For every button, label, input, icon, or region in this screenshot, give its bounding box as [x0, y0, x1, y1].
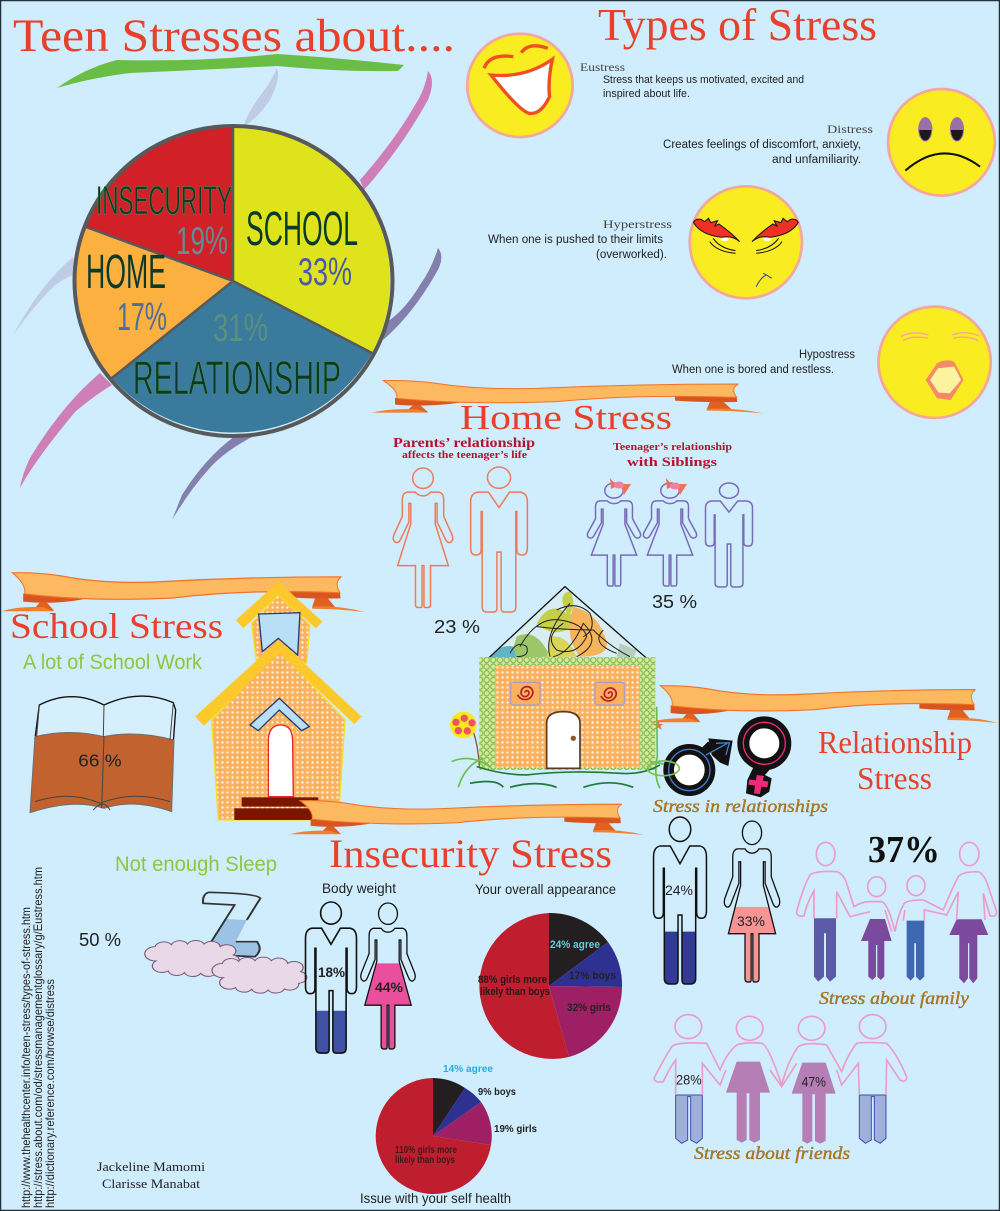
icon: distress face: [888, 89, 995, 196]
pie chart: self health: 9% boys: [478, 1086, 516, 1098]
pie chart: overall appearance: 17% boys: [569, 970, 616, 982]
text: source urls: [19, 867, 57, 1208]
heading: relationship stress: [818, 724, 972, 796]
figure: relationship man 24 percent: 24%: [665, 882, 693, 898]
heading: relationship stress: Stress: [857, 760, 932, 796]
flower: orange: [653, 721, 663, 730]
stat: 23 percent: 23 %: [434, 617, 480, 637]
label: school: 33%: [298, 251, 352, 294]
figures: friends: 47%: [802, 1074, 826, 1090]
pie chart: self health: 19% girls: [494, 1123, 537, 1135]
figure: body weight man 18 percent: 18%: [318, 964, 346, 980]
text: source urls: http://www.thehealthcenter.info/teen-stress/types-of-stress.htm: [19, 907, 33, 1208]
text: eustress: Stress that keeps us motivated, excited and: [603, 74, 804, 86]
icon: open book 66 percent: [30, 696, 176, 813]
text: parents relationship: affects the teenager’s life: [402, 450, 527, 461]
label: stress in relationships: Stress in relationships: [653, 796, 828, 816]
label: insecurity: 19%: [176, 220, 228, 263]
text: parents relationship: Parents’ relationship: [393, 436, 535, 451]
label: relationship: RELATIONSHIP: [133, 351, 341, 404]
panel: home stress: [393, 398, 752, 637]
panel: insecurity stress: [306, 831, 622, 1206]
stat: 35 percent: 35 %: [652, 592, 697, 612]
text: a lot of school work: A lot of School Work: [23, 651, 202, 674]
figure: body weight man 18 percent: [306, 902, 356, 1053]
text: distress: Creates feelings of discomfort, anxiety,: [663, 139, 861, 151]
text: distress: Distress: [827, 124, 874, 136]
title: Teen Stresses about....: [13, 10, 455, 62]
label: relationship: [133, 307, 341, 404]
pie chart: overall appearance: 24% agree: [550, 939, 600, 951]
heading: home stress: Home Stress: [460, 398, 672, 437]
label: stress about friends: Stress about friends: [694, 1143, 850, 1163]
icon: male symbol: [647, 738, 733, 791]
label: stress about family: Stress about family: [819, 988, 969, 1008]
icon: open book 66 percent: 66 %: [78, 751, 122, 771]
text: not enough sleep: Not enough Sleep: [115, 853, 277, 876]
figure: mother: [393, 468, 453, 608]
icon: female symbol: [743, 722, 785, 797]
text: hyperstress: [488, 219, 673, 261]
pie chart: self health: 110% girls more: [395, 1145, 457, 1156]
label: school: [246, 203, 358, 294]
icon: school building: [195, 582, 362, 820]
pie chart: teen stress sources: [74, 126, 392, 436]
label: home: [86, 246, 167, 339]
label: insecurity: [96, 179, 232, 263]
ribbon: home stress: [372, 381, 763, 413]
figure: relationship woman 33 percent: 33%: [737, 913, 765, 929]
figures: friends: 28%: [676, 1071, 702, 1087]
icon: hypostress face: [878, 307, 991, 418]
figure: body weight woman 44 percent: 44%: [375, 979, 404, 995]
ribbon: school stress: [2, 573, 365, 612]
text: hypostress: When one is bored and restless.: [672, 364, 834, 376]
label: body weight: Body weight: [322, 880, 396, 896]
text: authors: Clarisse Manabat: [102, 1176, 200, 1191]
grass: [452, 707, 680, 788]
text: parents relationship: [393, 436, 535, 461]
stat: 37 percent: 37%: [868, 829, 940, 871]
icon: house: [450, 587, 680, 788]
text: source urls: http://dictionary.reference.com/browse/distress: [43, 979, 57, 1208]
window: right: [595, 682, 624, 705]
text: eustress: Eustress: [580, 62, 626, 74]
pie chart: overall appearance: [478, 913, 622, 1059]
text: authors: Jackeline Mamomi: [97, 1159, 205, 1174]
door: [547, 712, 580, 768]
pie chart: overall appearance: 88% girls more: [478, 974, 547, 986]
window: left: [511, 682, 540, 705]
label: relationship: 31%: [213, 307, 268, 350]
figure: body weight woman 44 percent: [361, 903, 415, 1049]
heading: relationship stress: Relationship: [818, 724, 972, 760]
icon: sleeping z and clouds: [145, 892, 307, 993]
brush stroke decorations: [13, 68, 441, 520]
heading: insecurity stress: Insecurity Stress: [329, 831, 612, 876]
panel: types of stress faces: [467, 34, 995, 418]
icon: eustress smiley: [467, 34, 573, 137]
text: hypostress: Hypostress: [799, 349, 855, 361]
ribbon: relationship stress: [650, 686, 998, 723]
pie chart: overall appearance: 32% girls: [567, 1002, 611, 1014]
label: home: HOME: [86, 246, 166, 299]
figure: brother: [706, 483, 752, 587]
pie chart: overall appearance: likely than boys: [480, 986, 550, 998]
label: school: SCHOOL: [246, 203, 358, 256]
label: home: 17%: [117, 296, 167, 339]
figure: father: [471, 467, 527, 612]
text: hyperstress: When one is pushed to their limits: [488, 234, 663, 246]
text: distress: [663, 124, 874, 166]
figures: friends: [654, 1015, 907, 1144]
icon: hyperstress face: [690, 186, 802, 298]
text: distress: and unfamiliarity.: [772, 154, 861, 166]
text: siblings relationship: [613, 441, 732, 469]
text: siblings relationship: with Siblings: [627, 454, 717, 469]
figure: sister two: [643, 478, 697, 586]
pie chart: self health: [376, 1063, 537, 1194]
panel: school stress: [10, 582, 362, 820]
text: eustress: [580, 62, 804, 100]
text: hypostress: [672, 349, 855, 376]
pie chart: self health: 14% agree: [443, 1063, 493, 1075]
panel: not enough sleep: [79, 853, 307, 993]
label: overall appearance: Your overall appearance: [475, 881, 616, 897]
label: insecurity: INSECURITY: [96, 179, 232, 223]
flower: yellow: [450, 712, 479, 767]
panel: relationship stress: [647, 722, 997, 1163]
heading: school stress: School Stress: [10, 606, 223, 646]
figure: relationship woman 33 percent: [724, 821, 780, 982]
text: eustress: inspired about life.: [603, 88, 690, 100]
figures: family: [797, 842, 997, 983]
title underline brush: [57, 54, 404, 88]
text: authors: [97, 1159, 205, 1191]
label: self health: Issue with your self health: [360, 1190, 511, 1206]
figure: sister one: [587, 478, 641, 586]
text: siblings relationship: Teenager’s relationship: [613, 441, 732, 453]
text: hyperstress: (overworked).: [596, 249, 667, 261]
figure: relationship man 24 percent: [654, 817, 706, 984]
text: source urls: http://stress.about.com/od/stressmanagementglossary/g/Eustress.htm: [31, 867, 45, 1208]
stat: 50 percent: 50 %: [79, 930, 121, 950]
heading: types of stress: Types of Stress: [598, 0, 877, 50]
text: hyperstress: Hyperstress: [603, 219, 673, 231]
ribbon: insecurity stress: [290, 801, 644, 835]
pie chart: self health: likely than boys: [395, 1155, 455, 1166]
